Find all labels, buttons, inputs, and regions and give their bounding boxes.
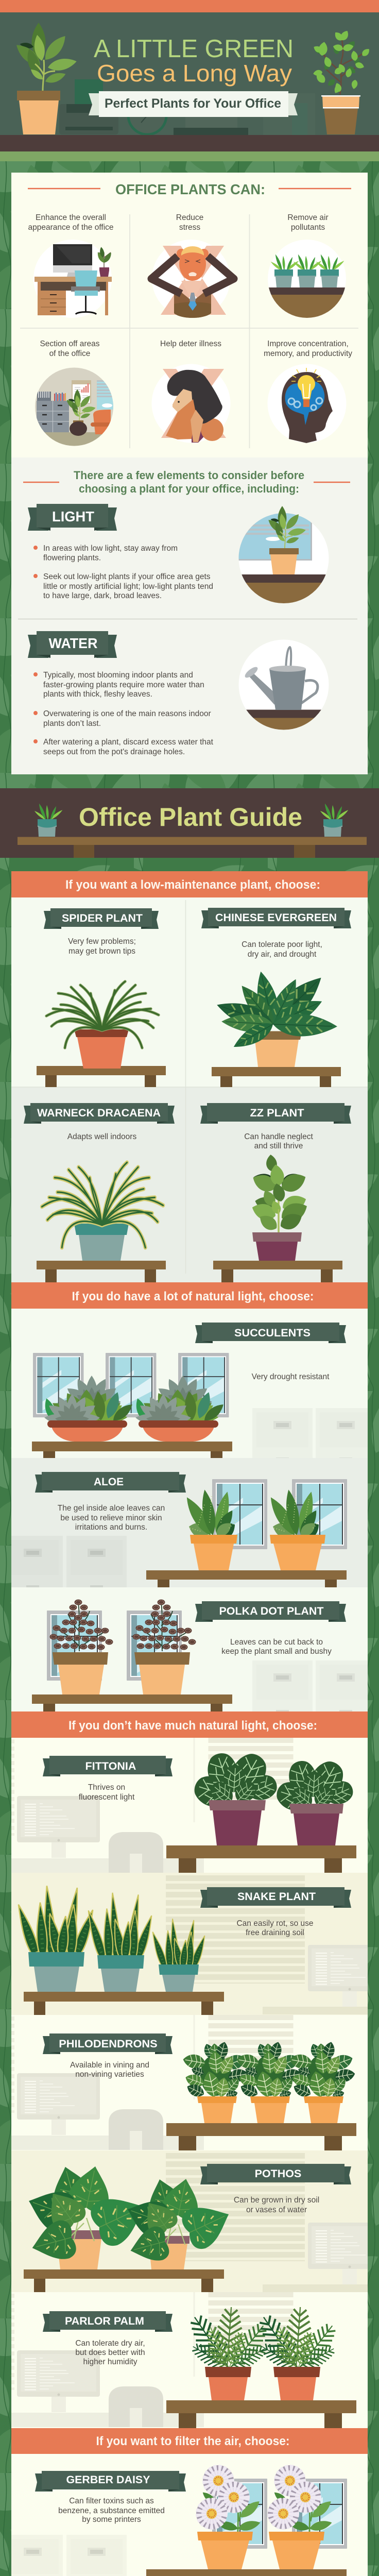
card: snake plant: [11, 1873, 379, 2015]
illustration: fittonia: [166, 1748, 357, 1873]
heading: elements to consider: choosing a plant for your office, including:: [79, 482, 299, 495]
panel: air filtering plants: [3, 2428, 376, 2576]
text: fittonia: fluorescent light: [79, 1793, 135, 1802]
shelf and strip: [0, 135, 379, 161]
icon: small succulent right: [319, 803, 349, 837]
banner: polka dot plant: [195, 1601, 346, 1622]
illustration: chinese evergreen: [212, 970, 341, 1087]
header: filter the air: If you want to filter the air, choose:: [96, 2434, 289, 2448]
banner: fittonia: [43, 1756, 173, 1776]
plant right header: [313, 29, 371, 134]
text: chinese evergreen: dry air, and drought: [248, 950, 317, 959]
text: pothos: or vases of water: [246, 2206, 307, 2214]
card: parlor palm: [11, 2292, 368, 2428]
icon: brain lightbulb head: [268, 364, 346, 443]
text: improve concentration: memory, and productivity: [264, 349, 352, 358]
banner: pothos: POTHOS: [255, 2168, 301, 2180]
text: enhance appearance: [28, 213, 114, 232]
bullet list: water: faster-growing plants require more water than: [43, 681, 204, 689]
text: chinese evergreen: Can tolerate poor light,: [242, 940, 322, 949]
card: pothos: [11, 2150, 379, 2292]
text: aloe: The gel inside aloe leaves can: [58, 1504, 165, 1513]
banner: light: [28, 504, 117, 531]
icon: watering can: [237, 640, 332, 734]
banner: snake plant: [200, 1887, 351, 1908]
illustration: zz plant: [213, 1154, 342, 1282]
card: aloe: [3, 1458, 368, 1587]
header: low maintenance: If you want a low-maintenance plant, choose:: [65, 878, 320, 892]
icon: potted plants on shelf: [268, 240, 346, 320]
text: succulents: Very drought resistant: [252, 1372, 330, 1381]
banner: philodendrons: PHILODENDRONS: [59, 2038, 158, 2050]
text: gerber daisy: by some printers: [82, 2515, 141, 2524]
text: gerber daisy: benzene, a substance emitted: [58, 2506, 165, 2515]
card: zz plant: [200, 1103, 351, 1282]
title: Goes a Long Way: [97, 60, 292, 87]
text: parlor palm: [75, 2339, 145, 2366]
banner: zz plant: ZZ PLANT: [250, 1107, 304, 1119]
text: aloe: [58, 1504, 165, 1530]
banner: polka dot plant: POLKA DOT PLANT: [219, 1605, 324, 1617]
illustration: parlor palm: [166, 2306, 356, 2428]
banner: succulents: SUCCULENTS: [234, 1327, 311, 1339]
text: snake plant: [236, 1919, 314, 1937]
header: natural light: [11, 1282, 368, 1309]
card: warneck dracaena: [24, 1103, 175, 1282]
icon: stressed man: [151, 240, 234, 318]
text: aloe: be used to relieve minor skin: [60, 1514, 162, 1522]
text: aloe: irritations and burns.: [75, 1523, 147, 1532]
bullet list: water: plants don’t last.: [43, 719, 101, 728]
card: gerber daisy: [3, 2454, 368, 2576]
illustration: polka dot plant: [32, 1599, 232, 1711]
bullet list: light: In areas with low light, stay away from: [43, 544, 178, 553]
text: pothos: [234, 2197, 319, 2212]
subtitle ribbon: [89, 91, 298, 117]
banner: parlor palm: [43, 2311, 173, 2332]
bullet list: light: flowering plants.: [43, 553, 101, 563]
heading: elements to consider: There are a few elements to consider before: [74, 469, 304, 482]
text: gerber daisy: Can filter toxins such as: [69, 2497, 154, 2505]
faint office background: [59, 79, 315, 135]
icon: plant by window: [237, 506, 332, 605]
bullet list: water: Typically, most blooming indoor plants and: [43, 671, 193, 680]
heading: office plants can: OFFICE PLANTS CAN:: [115, 181, 265, 197]
bullet list: light: Seek out low-light plants if your office area gets: [43, 572, 211, 581]
bullet list: light: [33, 544, 213, 600]
text: snake plant: Can easily rot, so use: [236, 1919, 314, 1928]
illustration: aloe: [146, 1479, 347, 1587]
text: reduce stress: stress: [179, 223, 200, 232]
illustration: philodendrons: [166, 2041, 356, 2150]
icon: office room: [34, 367, 114, 448]
banner: aloe: [35, 1472, 186, 1493]
card: fittonia: [11, 1738, 368, 1873]
banner: parlor palm: PARLOR PALM: [65, 2315, 144, 2327]
text: deter illness: Help deter illness: [160, 340, 221, 348]
text: gerber daisy: [58, 2497, 165, 2524]
text: fittonia: [79, 1783, 135, 1802]
bullet list: water: plants with thick, fleshy leaves.: [43, 690, 152, 699]
text: reduce stress: [176, 213, 203, 232]
text: parlor palm: higher humidity: [83, 2358, 137, 2366]
banner: gerber daisy: GERBER DAISY: [66, 2474, 150, 2486]
icon: sick woman: [151, 364, 231, 443]
icon: small succulent left: [33, 803, 63, 837]
band: office plant guide: [0, 788, 379, 858]
icon: office desk: [33, 240, 113, 318]
text: reduce stress: Reduce: [176, 213, 203, 222]
text: polka dot plant: keep the plant small and bushy: [221, 1647, 332, 1656]
text: philodendrons: Available in vining and: [70, 2061, 149, 2070]
panel: office plants can: [11, 173, 368, 457]
illustration: spider plant: [37, 981, 166, 1087]
text: philodendrons: non-vining varieties: [75, 2070, 144, 2079]
bullet list: light: to have large, dark, broad leaves.: [43, 591, 162, 600]
text: parlor palm: but does better with: [75, 2348, 145, 2357]
illustration: snake plant: [14, 1886, 224, 2015]
banner: water: WATER: [48, 635, 98, 651]
text: philodendrons: [70, 2061, 149, 2079]
illustration: pothos: [22, 2162, 237, 2292]
shelf: guide band: [18, 837, 367, 858]
text: improve concentration: [264, 340, 352, 358]
text: polka dot plant: [221, 1638, 332, 1656]
panel: natural light plants: [3, 1282, 376, 1712]
bullet list: water: Overwatering is one of the main reasons indoor: [43, 709, 211, 718]
banner: spider plant: SPIDER PLANT: [62, 912, 143, 924]
banner: gerber daisy: [35, 2471, 186, 2492]
header: low light: If you don’t have much natural light, choose:: [68, 1719, 317, 1733]
text: zz plant: and still thrive: [254, 1142, 303, 1150]
heading: elements to consider: [23, 469, 350, 495]
text: zz plant: [244, 1132, 313, 1150]
text: enhance appearance: Enhance the overall: [36, 213, 106, 222]
header band: [0, 0, 379, 161]
banner: warneck dracaena: WARNECK DRACAENA: [37, 1107, 161, 1119]
illustration: gerber daisy: [146, 2465, 347, 2576]
text: enhance appearance: appearance of the office: [28, 223, 114, 232]
card: chinese evergreen: [201, 908, 351, 1087]
card: philodendrons: [11, 2015, 368, 2150]
banner: water: [28, 631, 117, 658]
title: A LITTLE GREEN: [94, 35, 294, 63]
text: remove pollutants: pollutants: [291, 223, 325, 232]
text: spider plant: [68, 937, 136, 956]
bullet list: water: [33, 671, 214, 756]
illustration: warneck dracaena: [37, 1162, 166, 1282]
title: [94, 35, 294, 87]
text: improve concentration: Improve concentration,: [267, 340, 349, 348]
banner: chinese evergreen: [201, 908, 351, 928]
illustration: succulents: [32, 1353, 232, 1459]
card: spider plant: [37, 908, 166, 1087]
banner: zz plant: [200, 1103, 351, 1124]
banner: aloe: ALOE: [94, 1476, 124, 1488]
plant left header: [13, 23, 78, 134]
text: spider plant: Very few problems;: [68, 937, 136, 946]
bullet list: water: seeps out from the pot's drainage holes.: [43, 748, 185, 756]
banner: warneck dracaena: [24, 1103, 175, 1124]
text: section off areas: Section off areas: [40, 340, 100, 348]
text: parlor palm: Can tolerate dry air,: [75, 2339, 145, 2348]
text: polka dot plant: Leaves can be cut back to: [230, 1638, 323, 1647]
text: warneck dracaena: Adapts well indoors: [67, 1132, 136, 1141]
card: succulents: [11, 1309, 376, 1460]
panel: low-maintenance plants: [11, 871, 368, 1282]
banner: succulents: [195, 1323, 346, 1343]
banner: chinese evergreen: CHINESE EVERGREEN: [215, 912, 337, 924]
header: low light: [11, 1711, 368, 1738]
text: remove pollutants: Remove air: [287, 213, 329, 222]
header: natural light: If you do have a lot of natural light, choose:: [72, 1290, 314, 1303]
panel: elements to consider: [11, 457, 368, 774]
banner: snake plant: SNAKE PLANT: [237, 1891, 316, 1903]
text: snake plant: free draining soil: [246, 1928, 304, 1937]
title: office plant guide: Office Plant Guide: [79, 803, 302, 832]
banner: spider plant: [44, 908, 159, 929]
text: fittonia: Thrives on: [88, 1783, 125, 1792]
card: polka dot plant: [11, 1587, 376, 1712]
text: section off areas: [40, 340, 100, 358]
text: section off areas: of the office: [49, 349, 90, 358]
text: pothos: Can be grown in dry soil: [234, 2196, 319, 2205]
text: chinese evergreen: [242, 940, 322, 959]
subtitle ribbon: Perfect Plants for Your Office: [105, 96, 281, 111]
header: low maintenance: [11, 871, 368, 897]
banner: pothos: [200, 2164, 351, 2184]
banner: philodendrons: [43, 2033, 173, 2054]
header: filter the air: [11, 2428, 368, 2454]
text: remove pollutants: [287, 213, 329, 232]
text: zz plant: Can handle neglect: [244, 1132, 313, 1141]
panel: low light plants: [11, 1711, 379, 2428]
bullet list: light: little or mostly artificial light; low-light plants tend: [43, 582, 213, 591]
banner: light: LIGHT: [52, 509, 94, 524]
text: spider plant: may get brown tips: [68, 947, 135, 956]
bullet list: water: After watering a plant, discard excess water that: [43, 738, 214, 747]
banner: fittonia: FITTONIA: [85, 1760, 136, 1772]
